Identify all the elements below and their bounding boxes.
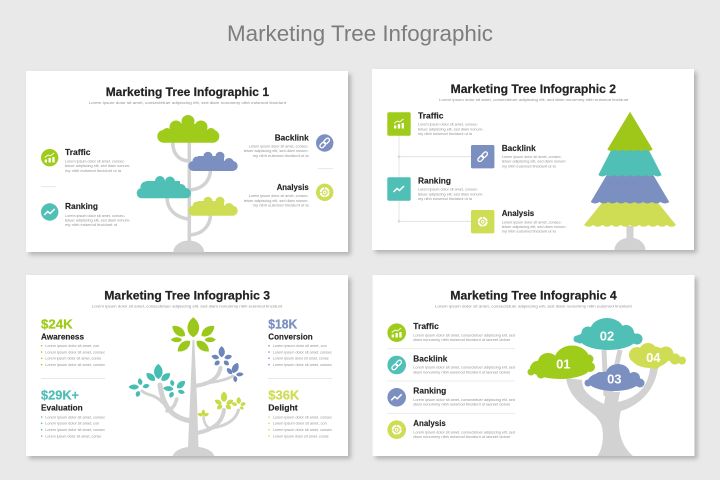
branching tree with leaves: [128, 317, 246, 456]
item: backlink: my nibh euismod tincidunt ut la: [502, 163, 557, 168]
panel: infographic 1: [26, 71, 351, 255]
stat: awareness: Lorem ipsum dolor sit amet, consec: [45, 362, 105, 367]
item: traffic: Traffic: [65, 147, 91, 157]
stat: awareness: Lorem ipsum dolor sit amet, conse: [45, 356, 101, 361]
item: backlink: Lorem ipsum dolor sit amet, consec-: [249, 144, 309, 148]
item: backlink: [244, 132, 333, 158]
item: analysis: Lorem ipsum dolor sit amet, consec-: [502, 219, 562, 224]
stat: awareness: Lorem ipsum dolor sit amet, consec: [45, 349, 105, 354]
list item: analysis: Analysis: [413, 418, 446, 428]
item: traffic: Lorem ipsum dolor sit amet, consec-: [65, 158, 126, 164]
item: traffic: [387, 110, 484, 136]
item: traffic: Traffic: [418, 110, 444, 120]
item: backlink: tetuer adipiscing elit, sed diam nonum-: [244, 148, 309, 153]
stat: conversion: Lorem ipsum dolor sit amet, consec: [273, 349, 332, 354]
stat: evaluation: [41, 388, 105, 438]
heading 4: Marketing Tree Infographic 4: [450, 289, 617, 303]
list item: analysis: diam nonummy nibh euismod tincidunt ut laoreet dolore: [413, 434, 510, 439]
subtitle 4: Lorem ipsum dolor sit amet, consectetuer adipiscing elit, sed diam nonummy nibh euismod tincidunt: [435, 304, 633, 308]
list item: backlink: [387, 353, 515, 374]
stat: evaluation: $29K+: [41, 388, 79, 403]
item: ranking: Lorem ipsum dolor sit amet, consec-: [65, 213, 126, 218]
stat: delight: [268, 388, 332, 438]
item: traffic: my nibh euismod tincidunt ut la: [418, 131, 473, 136]
item: ranking: Lorem ipsum dolor sit amet, consec-: [418, 187, 479, 192]
stat: awareness: [41, 317, 105, 367]
stat: delight: Lorem ipsum dolor sit amet, con: [273, 421, 327, 426]
list item: traffic: [387, 321, 515, 342]
item: ranking: tetuer adipiscing elit, sed diam nonum-: [65, 218, 131, 222]
panel: infographic 4: [372, 275, 698, 459]
item: ranking: [41, 201, 131, 227]
item: backlink: [471, 143, 567, 168]
list item: backlink: Backlink: [413, 353, 448, 363]
heading 1: Marketing Tree Infographic 1: [106, 85, 269, 99]
item: ranking: tetuer adipiscing elit, sed diam nonum-: [418, 191, 484, 196]
item: traffic: tetuer adipiscing elit, sed diam nonum-: [418, 126, 484, 131]
item: backlink: my nibh euismod tincidunt ut la: [253, 153, 310, 158]
subtitle 1: Lorem ipsum dolor sit amet, consectetuer adipiscing elit, sed diam nonummy nibh euismod tincidunt: [89, 100, 287, 105]
stat: awareness: Lorem ipsum dolor sit amet, con: [45, 343, 99, 348]
item: backlink: Backlink: [275, 132, 309, 142]
item: traffic: [41, 147, 131, 173]
item: analysis: Analysis: [502, 208, 534, 218]
item: traffic: tetuer adipiscing elit, sed diam nonum-: [65, 163, 131, 168]
list item: ranking: Ranking: [413, 386, 446, 396]
layered pine tree: [584, 112, 676, 250]
connector lines: [398, 135, 471, 222]
list item: traffic: Lorem ipsum dolor sit amet, consectetuer adipiscing elit, sed: [413, 332, 515, 337]
stat: evaluation: Evaluation: [41, 403, 83, 413]
stat: delight: $36K: [268, 388, 300, 403]
list item: ranking: Lorem ipsum dolor sit amet, consectetuer adipiscing elit, sed: [413, 397, 515, 402]
number 01: 01: [556, 357, 571, 372]
item: traffic: Lorem ipsum dolor sit amet, consec-: [418, 122, 479, 127]
list item: traffic: diam nonummy nibh euismod tincidunt ut laoreet dolore: [413, 337, 510, 342]
stat: conversion: Lorem ipsum dolor sit amet, conse: [273, 356, 329, 361]
stat: evaluation: Lorem ipsum dolor sit amet, consec: [45, 414, 105, 419]
number 03: 03: [607, 371, 622, 386]
list item: analysis: [387, 418, 515, 439]
number 04: 04: [646, 350, 661, 365]
stat: evaluation: Lorem ipsum dolor sit amet, conse: [45, 433, 101, 438]
item: analysis: Analysis: [277, 182, 309, 192]
heading 3: Marketing Tree Infographic 3: [104, 289, 270, 303]
stat: awareness: $24K: [41, 317, 73, 332]
numbered cloud tree: [528, 318, 686, 456]
main title: Marketing Tree Infographic: [227, 21, 493, 46]
item: analysis: my nibh euismod tincidunt ut la: [253, 203, 310, 208]
item: ranking: my nibh euismod tincidunt ut la: [418, 196, 473, 201]
stat: delight: Lorem ipsum dolor sit amet, consec: [273, 414, 332, 419]
item: analysis: Lorem ipsum dolor sit amet, consec-: [249, 193, 309, 198]
list item: backlink: diam nonummy nibh euismod tincidunt ut laoreet dolore: [413, 369, 510, 374]
item: analysis: tetuer adipiscing elit, sed diam nonum-: [244, 198, 309, 203]
item: backlink: Backlink: [502, 143, 536, 153]
item: traffic: my nibh euismod tincidunt ut la: [65, 168, 122, 173]
item: backlink: tetuer adipiscing elit, sed diam nonum-: [502, 159, 567, 164]
stat: evaluation: Lorem ipsum dolor sit amet, consec: [45, 427, 105, 432]
stat: awareness: Awareness: [41, 332, 84, 342]
list item: analysis: Lorem ipsum dolor sit amet, consectetuer adipiscing elit, sed: [413, 429, 515, 434]
stat: conversion: Lorem ipsum dolor sit amet, consec: [273, 362, 332, 367]
number 02: 02: [600, 328, 614, 343]
stat: conversion: Conversion: [268, 332, 313, 342]
item: analysis: [471, 208, 567, 234]
list item: ranking: diam nonummy nibh euismod tincidunt ut laoreet dolore: [413, 402, 510, 407]
subtitle 2: Lorem ipsum dolor sit amet, consectetuer adipiscing elit, sed diam nonummy nibh euismod tincidunt: [439, 97, 629, 102]
item: analysis: tetuer adipiscing elit, sed diam nonum-: [502, 224, 567, 229]
stat: conversion: [268, 317, 332, 367]
list item: traffic: Traffic: [413, 321, 439, 331]
heading 2: Marketing Tree Infographic 2: [451, 82, 616, 96]
item: analysis: my nibh euismod tincidunt ut la: [502, 229, 557, 234]
item: ranking: [387, 175, 484, 201]
tree with clouds: [137, 115, 238, 252]
subtitle 3: Lorem ipsum dolor sit amet, consectetuer adipiscing elit, sed diam nonummy nibh euismod tincidunt: [92, 304, 283, 308]
panel: infographic 3: [26, 275, 351, 459]
panel: infographic 2: [372, 69, 697, 253]
list item: backlink: Lorem ipsum dolor sit amet, consectetuer adipiscing elit, sed: [413, 365, 515, 370]
item: ranking: my nibh euismod tincidunt ut: [65, 222, 118, 227]
item: ranking: Ranking: [418, 175, 451, 185]
item: backlink: Lorem ipsum dolor sit amet, consec-: [502, 154, 562, 159]
stat: evaluation: Lorem ipsum dolor sit amet, con: [45, 421, 99, 426]
list item: ranking: [387, 386, 515, 407]
stat: delight: Lorem ipsum dolor sit amet, consec: [273, 427, 332, 432]
stat: delight: Delight: [268, 403, 298, 413]
stat: delight: Lorem ipsum dolor sit amet, conse: [273, 433, 329, 438]
item: analysis: [244, 182, 333, 208]
item: ranking: Ranking: [65, 201, 98, 211]
stat: conversion: Lorem ipsum dolor sit amet, con: [273, 343, 327, 348]
stat: conversion: $18K: [268, 317, 298, 332]
